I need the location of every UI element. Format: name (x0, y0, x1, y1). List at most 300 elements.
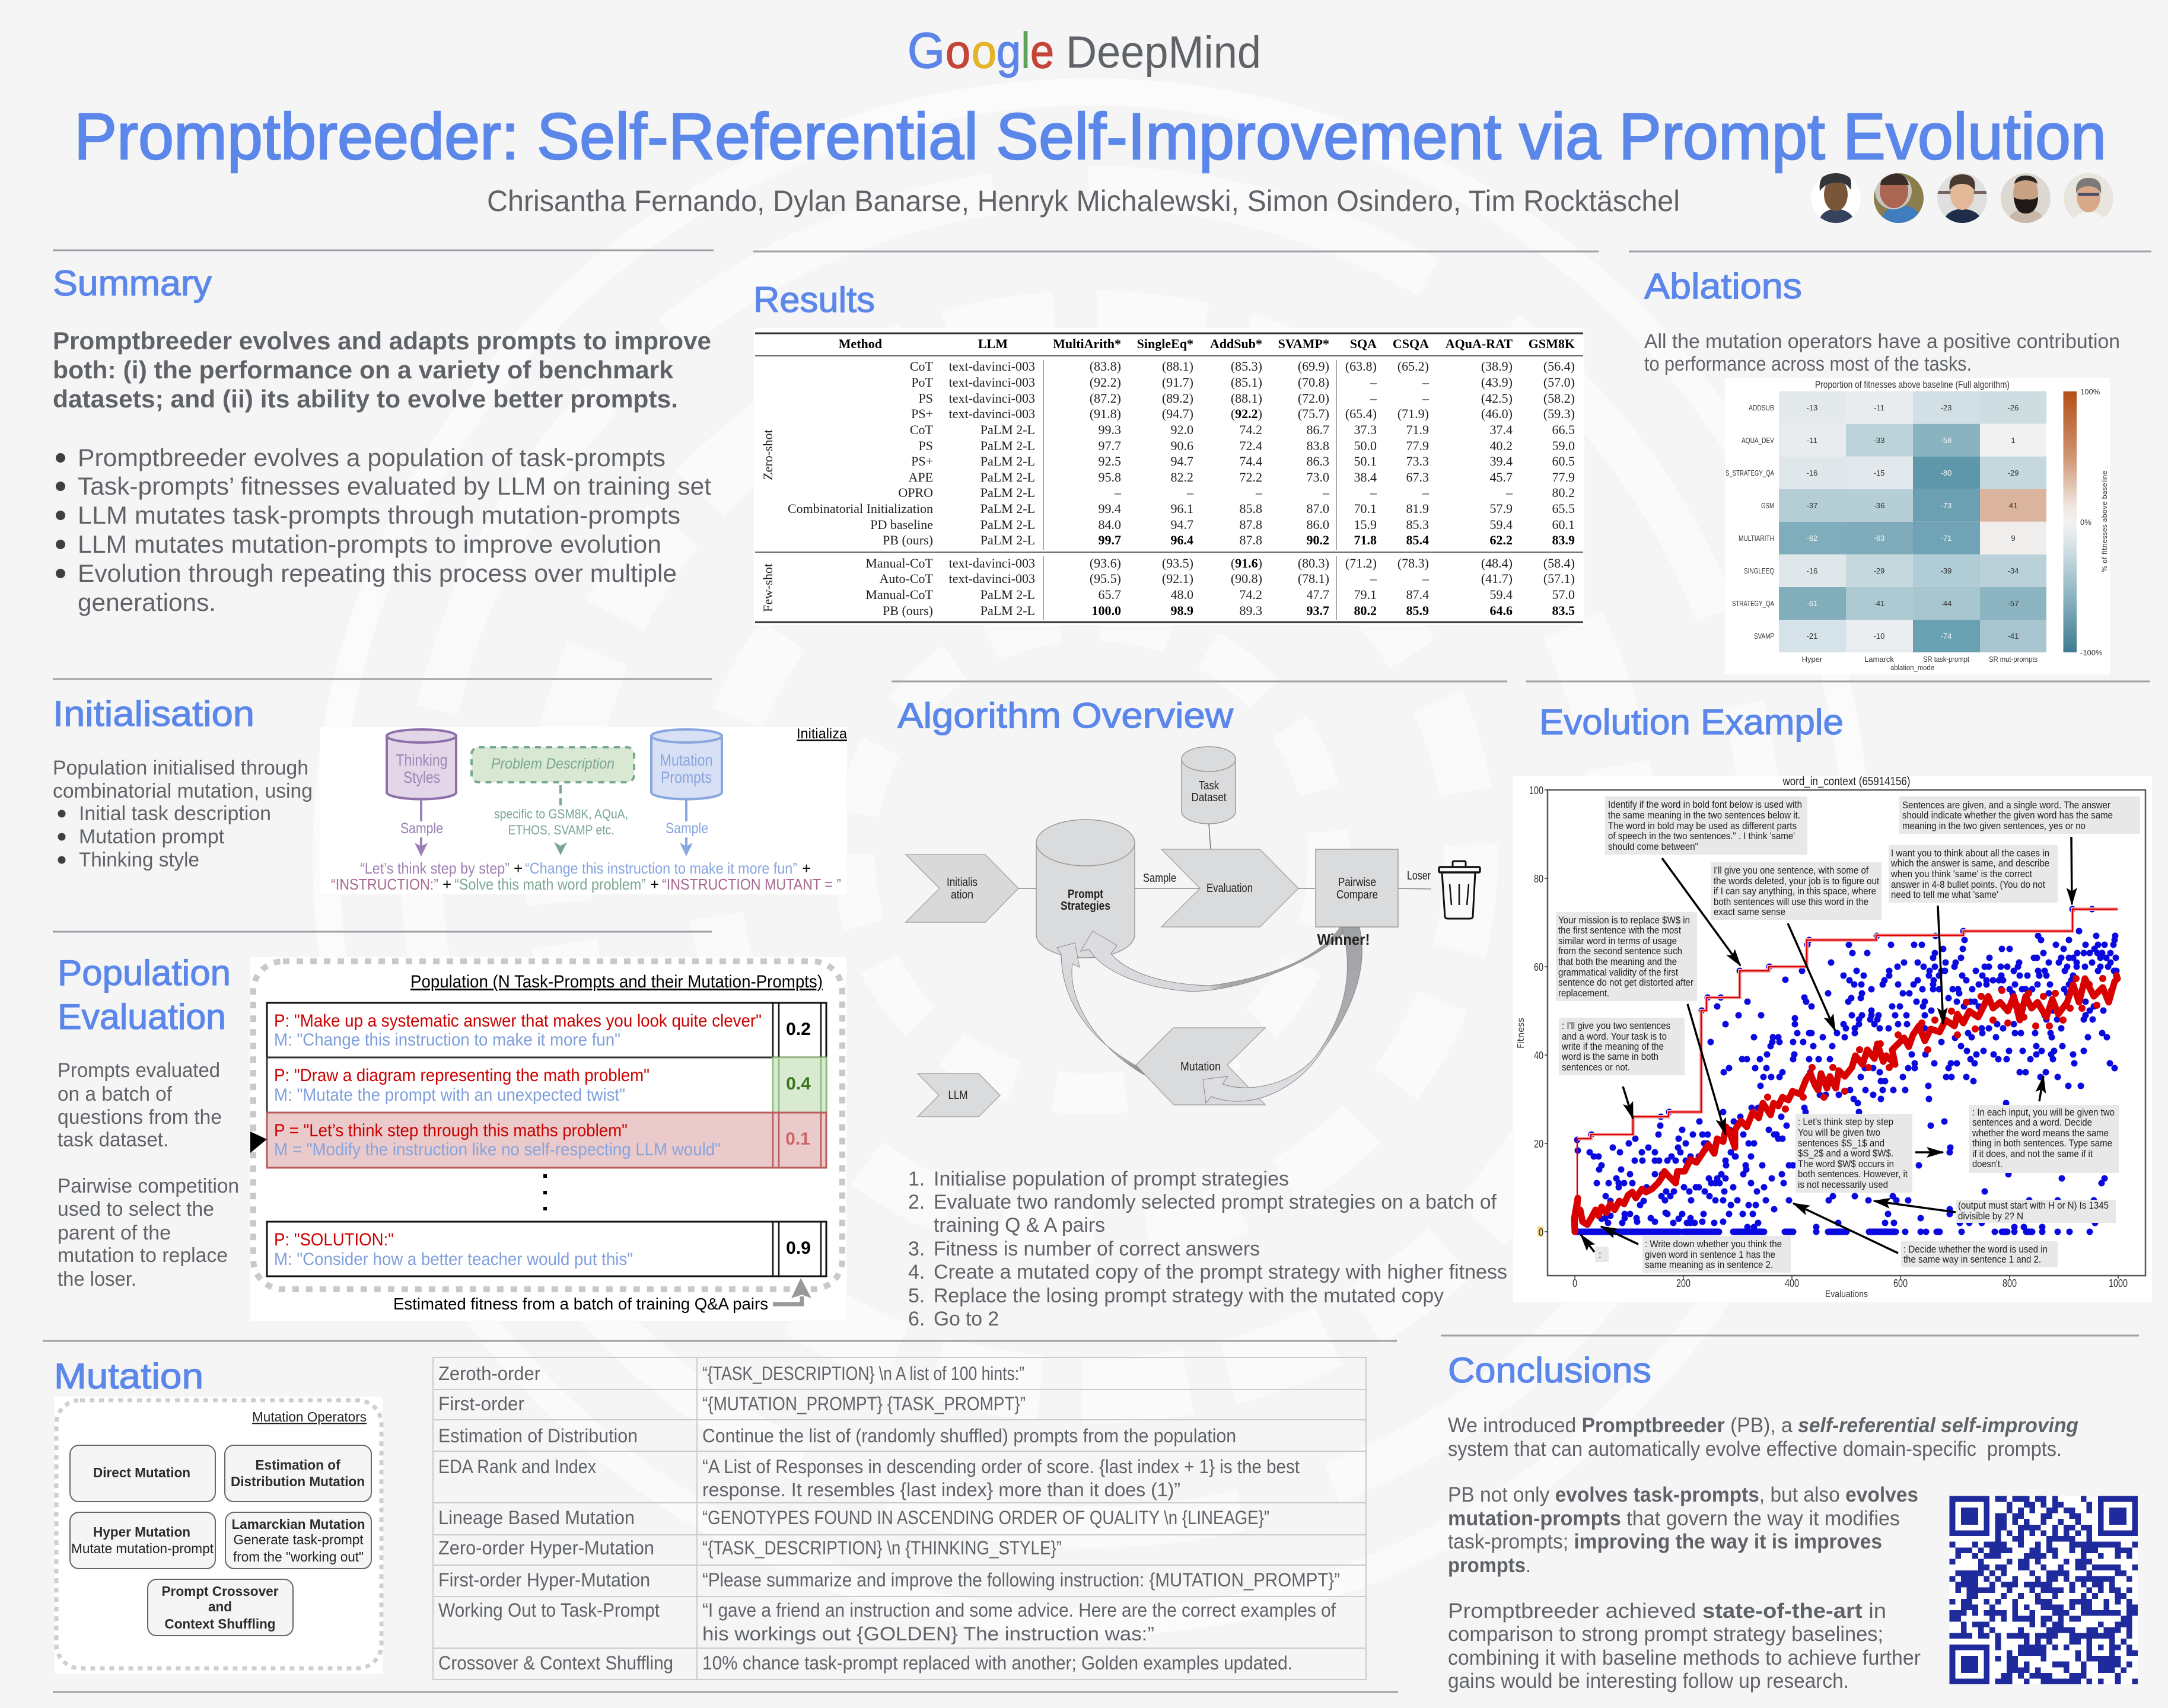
logo: Google DeepMind: e (1030, 25, 1054, 78)
results table: 86.7 (1306, 422, 1329, 437)
annotation: in each input: : In each input, you will be given two (1972, 1107, 2115, 1118)
results table: – (1370, 391, 1377, 406)
heading: Algorithm Overview: Algorithm Overview (897, 696, 1234, 735)
heatmap chart: 9 (2011, 534, 2016, 543)
arrow: sample thinking style (400, 799, 443, 856)
results table: 80.2 (1354, 603, 1377, 618)
arrow: sample (1135, 872, 1200, 888)
logo: Google DeepMind: G (908, 23, 945, 78)
summary lead text: Promptbreeder evolves and adapts prompts to improve (53, 327, 711, 355)
curved arrow: winner to mutation (1203, 928, 1362, 1103)
arrow: problem description specifics: specific to GSM8K, AQuA, (494, 807, 628, 821)
heatmap chart: 41 (2009, 501, 2017, 510)
results table: – (1114, 485, 1122, 500)
population row 4: P: "SOLUTION:" (274, 1230, 394, 1250)
results table: 60.1 (1552, 517, 1575, 532)
combined prompt text: “Let’s think step by step” (360, 859, 510, 877)
annotation: think about all the cases: need to tell me what 'same' (1891, 889, 1998, 900)
heatmap chart: -21 (1807, 632, 1817, 640)
results table: 38.4 (1354, 470, 1377, 485)
combined prompt text: “INSTRUCTION:” (331, 875, 438, 893)
results table: 96.1 (1171, 501, 1193, 516)
panel: mutation (43, 1341, 1398, 1692)
results table: PD baseline (870, 517, 933, 532)
heatmap chart: -74 (1941, 632, 1951, 640)
results table: GSM8K (1529, 336, 1575, 351)
population row 1: 0.2 (786, 1019, 811, 1039)
results table: 87.4 (1406, 587, 1429, 602)
panel: initialisation (53, 679, 848, 894)
panel: evolution example (1513, 681, 2152, 1302)
numbered algorithm steps: Go to 2 (934, 1308, 999, 1330)
population row 2 (267, 1057, 826, 1113)
results table: (58.2) (1543, 391, 1575, 406)
algorithm flow diagram (906, 747, 1480, 1117)
axes labels: 1000 (2109, 1277, 2128, 1289)
LLM chevron (918, 1073, 1000, 1117)
annotation: identify the word: Identify if the word in bold font below is used with (1608, 799, 1802, 810)
results table: 39.4 (1490, 454, 1513, 469)
summary bullet list (56, 444, 711, 616)
results table: text-davinci-003 (949, 359, 1035, 374)
operator: lamarckian mutation (225, 1512, 371, 1569)
population evaluation description: parent of the (58, 1222, 171, 1244)
arrow: problem description specifics (494, 785, 628, 855)
results table: Few-shot (760, 563, 775, 612)
heatmap chart: -15 (1874, 469, 1884, 477)
results table: (85.3) (1231, 359, 1262, 374)
operator: hyper mutation (70, 1512, 215, 1569)
results table: 73.0 (1306, 470, 1329, 485)
cylinder: mutation prompts: Mutation (660, 751, 713, 769)
cylinder: mutation prompts: Prompts (661, 768, 712, 786)
operator: lamarckian mutation: Lamarckian Mutation (231, 1516, 365, 1532)
heading: Population Evaluation (58, 953, 231, 1037)
annotation: in each input (1969, 1105, 2119, 1173)
population row 3 loser: M = "Modify the instruction like no self-respecting LLM would" (274, 1140, 721, 1159)
heatmap chart: Proportion of fitnesses above baseline (Full algorithm) (1815, 379, 2010, 390)
axes labels: 200 (1676, 1277, 1691, 1289)
population row 1: M: "Change this instruction to make it more fun" (274, 1030, 620, 1050)
annotation boxes (1556, 796, 2140, 1273)
results table: (89.2) (1162, 391, 1193, 406)
heading: Ablations: Ablations (1644, 266, 1802, 306)
results table: PaLM 2-L (980, 501, 1035, 516)
results table: 99.7 (1099, 533, 1121, 547)
mutation shape (1136, 1028, 1265, 1105)
heatmap chart: % of fitnesses above baseline (2100, 470, 2109, 572)
annotation: output must start: divisible by 2? N (1958, 1210, 2023, 1222)
arrow: dataset to evaluation (1209, 824, 1211, 849)
results table: APE (908, 470, 933, 485)
population row 1: P: "Make up a systematic answer that makes you look quite clever" (274, 1011, 762, 1031)
results table: 94.7 (1171, 517, 1193, 532)
mutation operators diagram: Mutation Operators (252, 1409, 367, 1425)
combined prompt text: + (650, 875, 659, 893)
pairwise compare box (1316, 849, 1398, 927)
axes labels: 0 (1572, 1277, 1577, 1289)
loser label: Loser (1407, 869, 1431, 882)
results table: PS (919, 391, 933, 406)
task dataset cylinder: Task (1199, 779, 1220, 792)
annotation: in each input: thing in both sentences. Type same (1972, 1137, 2112, 1149)
results table: (94.7) (1162, 406, 1193, 421)
results table: 15.9 (1354, 517, 1377, 532)
population evaluation description: mutation to replace (58, 1244, 228, 1267)
results table: CoT (910, 359, 934, 374)
pairwise compare box: Compare (1336, 888, 1378, 901)
population row 2: M: "Mutate the prompt with an unexpected twist" (274, 1085, 625, 1105)
results table: 72.4 (1240, 438, 1262, 453)
operator: crossover: Prompt Crossover (161, 1583, 279, 1599)
annotation: your mission: the first sentence with the most (1558, 925, 1681, 936)
annotation: think step by step: You will be given two (1798, 1127, 1880, 1138)
annotation: sentences are given (1899, 796, 2140, 834)
axes labels: Evaluations (1825, 1289, 1868, 1299)
results table: 50.0 (1354, 438, 1377, 453)
mutation operators table: EDA Rank and Index (438, 1456, 596, 1477)
heatmap chart: AQUA_DEV (1742, 436, 1774, 445)
logo: Google DeepMind: l (1021, 23, 1030, 78)
conclusions text: gains would be interesting follow up research. (1448, 1669, 1849, 1693)
numbered algorithm steps: 2. (908, 1191, 925, 1213)
results table: – (1422, 571, 1430, 586)
results table: CoT (910, 422, 934, 437)
heatmap chart (1725, 378, 2110, 674)
cylinder: thinking styles (387, 729, 456, 799)
results table: (80.3) (1298, 556, 1329, 571)
results table: (88.1) (1162, 359, 1193, 374)
heatmap chart: ablation_mode (1890, 663, 1934, 672)
heatmap chart: -62 (1807, 534, 1817, 543)
results table: 67.3 (1406, 470, 1429, 485)
annotation: one sentence: the words deleted, your job is to figure out (1714, 875, 1879, 887)
results table: text-davinci-003 (949, 391, 1035, 406)
results table: (93.5) (1162, 556, 1193, 571)
population row 2: 0.4 (786, 1074, 811, 1094)
results table: (92.2) (1231, 406, 1262, 421)
logo: Google DeepMind (908, 23, 1261, 78)
panel: population evaluation (53, 932, 846, 1321)
results table: (91.8) (1090, 406, 1121, 421)
arrow: sample mutation prompt: Sample (666, 820, 708, 837)
results table: (57.1) (1543, 571, 1575, 586)
numbered algorithm steps (908, 1168, 1507, 1330)
combined prompt text: + (514, 859, 523, 877)
population row 4 (267, 1222, 826, 1276)
mutation operators table: “{TASK_DESCRIPTION} \n {THINKING_STYLE}” (702, 1537, 1062, 1559)
numbered algorithm steps: 5. (908, 1285, 925, 1307)
mutation operators table: “{MUTATION_PROMPT} {TASK_PROMPT}” (702, 1393, 1026, 1414)
results table: (58.4) (1543, 556, 1575, 571)
logo: Google DeepMind: o (945, 25, 970, 78)
results table: PS (919, 438, 933, 453)
mutation operators table: Crossover & Context Shuffling (438, 1652, 673, 1674)
arrow head (791, 1278, 811, 1298)
mutation operators diagram (55, 1397, 383, 1674)
results table: PaLM 2-L (980, 470, 1035, 485)
heatmap chart: -34 (2008, 566, 2019, 575)
initialisation chevron (906, 855, 1018, 922)
results table: (70.8) (1298, 375, 1329, 390)
ablations description (1644, 330, 2120, 375)
annotation: think about all the cases: answer in 4-8 bullet points. (You do not (1891, 879, 2045, 890)
annotation: one sentence: I'll give you one sentence, with some of (1714, 865, 1868, 876)
box: problem description: Problem Description (491, 756, 615, 772)
results table: 96.4 (1171, 533, 1193, 547)
results table: 73.3 (1406, 454, 1429, 469)
results table: 60.5 (1552, 454, 1575, 469)
results table: CSQA (1393, 336, 1429, 351)
operator: direct mutation (70, 1445, 215, 1502)
annotation: write down whether: given word in sentence 1 has the (1645, 1249, 1775, 1260)
results table: – (1370, 485, 1377, 500)
arrow: problem description specifics: ETHOS, SVAMP etc. (508, 823, 615, 837)
mutation operators table: “Please summarize and improve the following instruction: {MUTATION_PROMPT}” (702, 1569, 1340, 1591)
axes labels: Fitness (1516, 1018, 1526, 1049)
population evaluation description: Prompts evaluated (58, 1059, 220, 1082)
results table: – (1422, 391, 1430, 406)
population row 2: P: "Draw a diagram representing the math problem" (274, 1066, 650, 1085)
results table: Zero-shot (760, 429, 775, 480)
panel: conclusions (1441, 1336, 2139, 1693)
population evaluation description: used to select the (58, 1198, 214, 1221)
curved arrow: mutation to prompt strategies (1057, 943, 1145, 1075)
annotation: two sentences and a word: word is the same in both (1561, 1051, 1658, 1062)
mutation operators table: Zero-order Hyper-Mutation (438, 1537, 654, 1559)
annotation: in each input: sentences and a word. Decide (1972, 1117, 2092, 1128)
results table: 74.2 (1240, 587, 1262, 602)
evaluation chevron: Evaluation (1206, 882, 1253, 895)
cylinder: mutation prompts (651, 729, 722, 799)
results table: Manual-CoT (865, 556, 934, 571)
summary lead text: datasets; and (ii) its ability to evolve better prompts. (53, 385, 678, 413)
results table: 99.3 (1099, 422, 1121, 437)
ablations description: All the mutation operators have a positive contribution (1644, 330, 2120, 353)
results table: 99.4 (1099, 501, 1121, 516)
summary bullet list: LLM mutates mutation-prompts to improve evolution (78, 530, 661, 558)
numbered algorithm steps: Replace the losing prompt strategy with the mutated copy (934, 1285, 1444, 1307)
red best-fitness step line (1575, 909, 2118, 1232)
annotation: identify the word: the same meaning in the two sentences below it. (1608, 810, 1800, 821)
results table: (42.5) (1481, 391, 1513, 406)
arrow: sample thinking style: Sample (400, 820, 443, 837)
summary lead text: both: (i) the performance on a variety of benchmark (53, 356, 674, 384)
annotation: identify the word: of speech in the two sentences." . I think 'same' (1608, 830, 1795, 842)
heatmap chart: -63 (1874, 534, 1884, 543)
results table: (69.9) (1298, 359, 1329, 374)
results table: 100.0 (1091, 603, 1121, 618)
results table: SingleEq* (1137, 336, 1193, 351)
heading: Mutation: Mutation (54, 1356, 203, 1396)
conclusions text: combining it with baseline methods to achieve further (1448, 1646, 1921, 1669)
results table: PS+ (911, 454, 933, 469)
initialisation description: Initial task description (79, 802, 271, 825)
label: initialization heading: Initializa (797, 726, 848, 742)
heatmap chart: -26 (2008, 403, 2019, 412)
heatmap chart: -11 (1807, 436, 1817, 445)
results table: 85.9 (1406, 603, 1429, 618)
population diagram (250, 957, 846, 1321)
axes labels (1516, 785, 2128, 1299)
initialisation description: combinatorial mutation, using (53, 780, 313, 802)
axes labels: 100 (1529, 785, 1543, 796)
population row 3 loser: 0.1 (785, 1129, 810, 1149)
heatmap chart: MULTIARITH (1739, 534, 1774, 543)
axes labels: 40 (1534, 1050, 1543, 1062)
summary bullet list: Evolution through repeating this process over multiple (78, 559, 677, 587)
heatmap chart: -16 (1807, 566, 1817, 575)
population row 4: M: "Consider how a better teacher would put this" (274, 1250, 633, 1269)
initialisation chevron: Initialis (947, 876, 978, 889)
results table: PaLM 2-L (980, 438, 1035, 453)
task dataset cylinder: Dataset (1191, 791, 1227, 804)
axes labels: 60 (1534, 961, 1543, 973)
heatmap chart: -16 (1807, 469, 1817, 477)
population evaluation description: on a batch of (58, 1083, 173, 1105)
results table: 86.3 (1306, 454, 1329, 469)
results table: (63.8) (1345, 359, 1377, 374)
heatmap chart: -13 (1807, 403, 1817, 412)
ellipsis dots (543, 1174, 547, 1210)
axes labels: 20 (1534, 1138, 1543, 1150)
results table: 87.8 (1240, 533, 1262, 547)
results table: – (1422, 375, 1430, 390)
annotation: your mission: replacement. (1558, 987, 1609, 999)
numbered algorithm steps: Fitness is number of correct answers (934, 1238, 1260, 1260)
operator: hyper mutation: Mutate mutation-prompt (71, 1541, 214, 1556)
results table: 98.9 (1171, 603, 1193, 618)
results table: text-davinci-003 (949, 556, 1035, 571)
summary lead text (53, 327, 711, 413)
results table: Method (839, 336, 882, 351)
combined prompt text: + (802, 859, 811, 877)
results table: PaLM 2-L (980, 603, 1035, 618)
conclusions text: PB not only evolves task-prompts, but also evolves (1448, 1483, 1918, 1506)
annotation arrows (1581, 837, 2072, 1253)
annotation: write down whether: : Write down whether you think the (1645, 1238, 1782, 1250)
operator: lamarckian mutation: Generate task-prompt (234, 1532, 364, 1547)
results table: SVAMP* (1278, 336, 1329, 351)
annotation: two sentences and a word: sentences or not. (1562, 1062, 1630, 1073)
results table: – (1422, 485, 1430, 500)
results table: 47.7 (1306, 587, 1329, 602)
population row 4: 0.9 (786, 1238, 811, 1258)
results table: 81.9 (1406, 501, 1429, 516)
annotation: think about all the cases: I want you to think about all the cases in (1891, 847, 2049, 859)
arrow: fitness caption (773, 1296, 802, 1304)
results table: (41.7) (1481, 571, 1513, 586)
numbered algorithm steps: 6. (908, 1308, 925, 1330)
mutation operators table: his workings out {GOLDEN} The instruction was:” (702, 1623, 1154, 1645)
results table: 37.4 (1490, 422, 1513, 437)
arrow: sample: Sample (1143, 872, 1176, 885)
annotation: output must start: (output must start with H or N) Is 1345 (1958, 1200, 2109, 1211)
summary bullet list: Promptbreeder evolves a population of task-prompts (78, 444, 666, 471)
annotation: think about all the cases (1889, 845, 2058, 903)
operator: hyper mutation: Hyper Mutation (93, 1524, 190, 1540)
evolution scatter chart (1513, 775, 2152, 1302)
heatmap chart: -71 (1941, 534, 1951, 543)
annotation: colon: : (1599, 1249, 1602, 1260)
results table: text-davinci-003 (949, 375, 1035, 390)
heatmap chart: -57 (2008, 599, 2019, 608)
operator: lamarckian mutation: from the "working out" (233, 1549, 364, 1564)
heatmap chart: -41 (2008, 632, 2019, 640)
fitness caption: Estimated fitness from a batch of training Q&A pairs (393, 1295, 768, 1313)
results table: 90.6 (1171, 438, 1193, 453)
annotation: write down whether: same meaning as in sentence 2. (1645, 1259, 1773, 1270)
conclusions text: system that can automatically evolve effective domain-specific prompts. (1448, 1438, 2062, 1461)
population heading: Population (N Task-Prompts and their Mutation-Prompts) (410, 972, 823, 992)
connector arrows (1018, 888, 1431, 889)
annotation: two sentences and a word: : I'll give you two sentences (1562, 1020, 1670, 1031)
results table: PaLM 2-L (980, 517, 1035, 532)
results table: Manual-CoT (865, 587, 934, 602)
heatmap chart: -11 (1874, 403, 1884, 412)
conclusions text: We introduced Promptbreeder (PB), a self-referential self-improving (1448, 1414, 2078, 1437)
results table: 90.2 (1306, 533, 1329, 547)
summary bullet list: generations. (78, 588, 216, 616)
annotation: decide whether: the same way in sentence 1 and 2. (1903, 1254, 2041, 1265)
annotation: in each input: if it does, and not the same if it (1972, 1148, 2093, 1159)
heatmap chart: -73 (1941, 501, 1951, 510)
results table: PaLM 2-L (980, 454, 1035, 469)
heatmap chart: 100% (2080, 387, 2100, 396)
icon: trash can (1439, 861, 1480, 919)
logo: Google DeepMind: o (972, 25, 997, 78)
results table: 66.5 (1552, 422, 1575, 437)
heading: Initialisation: Initialisation (53, 694, 254, 734)
heading: Population Evaluation: Population (58, 953, 231, 993)
mutation operators table (433, 1358, 1366, 1680)
prompt strategies cylinder: Strategies (1061, 900, 1110, 913)
results table: (92.1) (1162, 571, 1193, 586)
evaluation chevron (1161, 849, 1298, 927)
mutation shape: Mutation (1180, 1060, 1221, 1073)
results table: 57.9 (1490, 501, 1513, 516)
heatmap chart: -10 (1874, 632, 1884, 640)
results table: (85.1) (1231, 375, 1262, 390)
numbered algorithm steps: 3. (908, 1238, 925, 1260)
results table: AQuA-RAT (1446, 336, 1513, 351)
results table: 71.8 (1354, 533, 1377, 547)
panel: summary (53, 250, 714, 616)
heading: Conclusions: Conclusions (1448, 1350, 1651, 1390)
conclusions text: prompts. (1448, 1554, 1531, 1577)
operator: crossover (148, 1579, 293, 1636)
results table: (46.0) (1481, 406, 1513, 421)
author portraits (1811, 172, 2113, 223)
results table: PaLM 2-L (980, 587, 1035, 602)
results table: (72.0) (1298, 391, 1329, 406)
heatmap chart: -44 (1941, 599, 1951, 608)
mutation operators table: First-order (438, 1393, 524, 1414)
logo: Google DeepMind: g (997, 25, 1021, 78)
red population mean points (1574, 976, 2118, 1232)
results table: PaLM 2-L (980, 485, 1035, 500)
results table: 72.2 (1240, 470, 1262, 485)
results table: – (1505, 485, 1513, 500)
population evaluation description: Pairwise competition (58, 1175, 239, 1197)
heatmap chart: Lamarck (1864, 655, 1894, 664)
operator: estimation of distribution: Estimation of (255, 1457, 340, 1473)
population evaluation description: questions from the (58, 1106, 222, 1129)
results table: PB (ours) (883, 533, 933, 547)
population row 1 (267, 1003, 826, 1057)
annotation: your mission (1556, 912, 1697, 1001)
results table: (78.3) (1397, 556, 1429, 571)
